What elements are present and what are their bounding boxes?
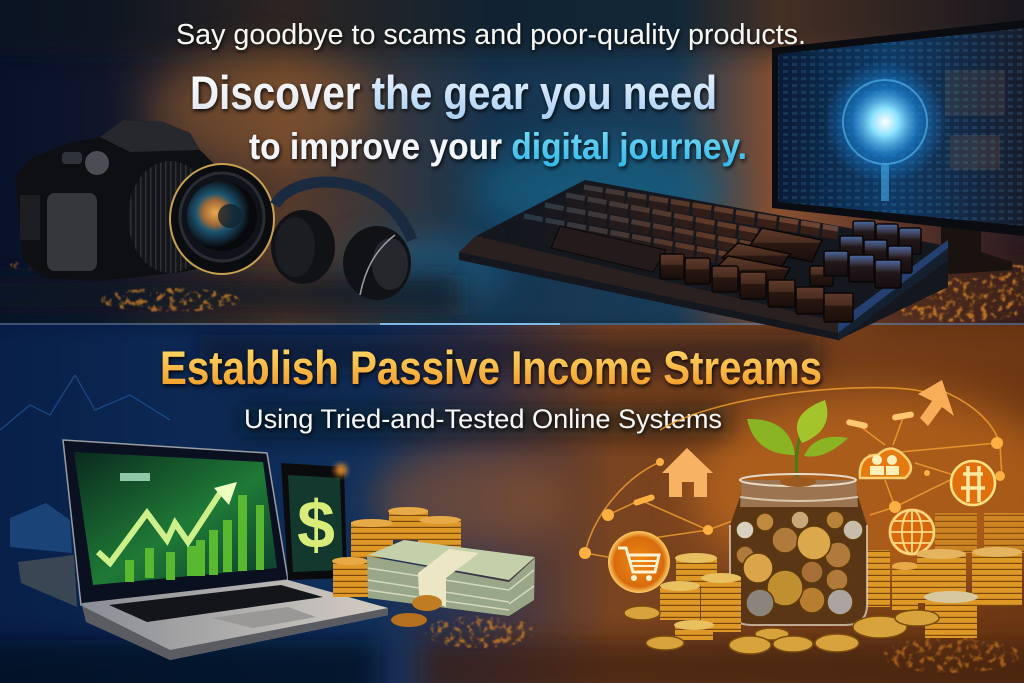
plant sprout [747, 400, 848, 478]
background: top band [0, 0, 1024, 325]
heading: passive income: Establish Passive Income Streams [160, 341, 822, 394]
tablet with dollar [281, 463, 347, 580]
intro line: Say goodbye to scams and poor-quality products. [176, 19, 806, 51]
right key cluster [824, 221, 921, 288]
jar coins [736, 511, 863, 617]
coin stacks front [660, 553, 741, 640]
icon: globe network [951, 461, 995, 505]
keyboard [459, 180, 948, 341]
icon: community cloud [860, 449, 911, 478]
coin jar [730, 474, 867, 625]
headline line 2: to improve your digital journey. [249, 126, 747, 167]
icon: shopping cart [608, 531, 670, 593]
network nodes [579, 411, 1005, 559]
loose coins [624, 606, 939, 654]
headphones [271, 182, 412, 300]
line chart background [0, 375, 170, 430]
icon: globe large [888, 508, 936, 556]
key highlights [524, 187, 838, 254]
stacked books [10, 503, 77, 607]
subheading: Using Tried-and-Tested Online Systems [244, 404, 722, 434]
camera [15, 120, 274, 281]
coin stacks behind jar [860, 513, 1024, 638]
front keys [660, 254, 853, 322]
bars [125, 495, 264, 582]
icon: house [662, 448, 713, 497]
divider glow line [0, 323, 1024, 325]
monitor [772, 20, 1024, 274]
cash stack [367, 540, 535, 627]
headline line 1: Discover the gear you need [190, 66, 717, 119]
background: bottom band [0, 325, 1024, 683]
icon: growth arrow [918, 380, 954, 426]
tablet with dollar: $ [297, 487, 335, 563]
network arcs [585, 388, 1002, 557]
speckled ground texture [10, 259, 1024, 673]
coin stacks left [332, 507, 461, 597]
spacebar [551, 226, 666, 272]
large keys [712, 228, 822, 287]
laptop [63, 440, 388, 660]
key rows [506, 191, 838, 258]
